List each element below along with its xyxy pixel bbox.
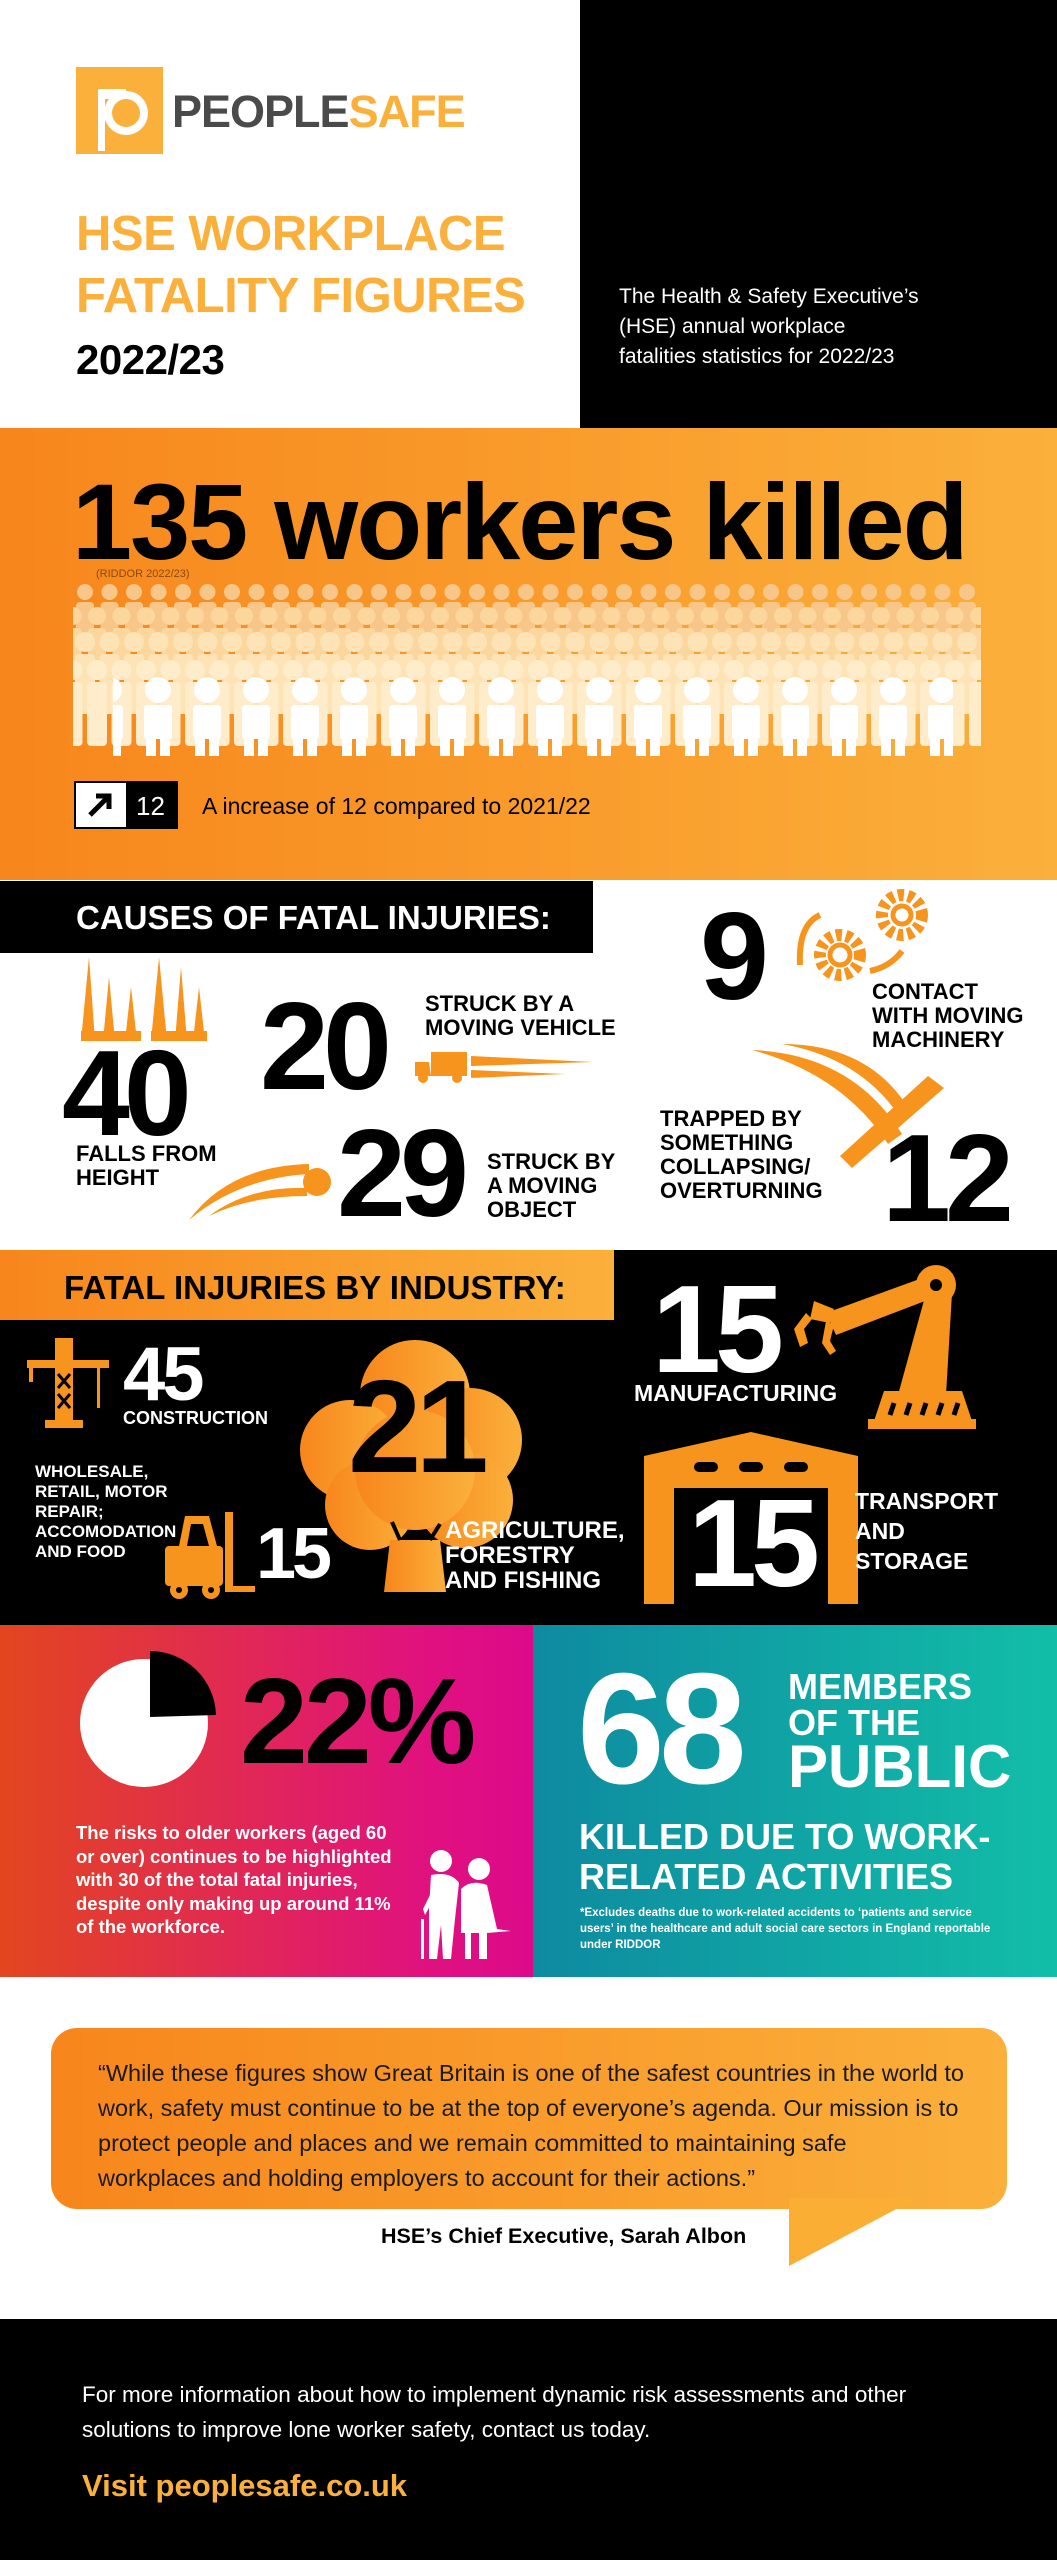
label: members of the public: PUBLIC [788, 1733, 1011, 1800]
text: older workers: or over) continues to be highlighted [76, 1846, 392, 1866]
icon: falling spikes [81, 957, 207, 1041]
stat: manufacturing [634, 1261, 837, 1406]
stat: wholesale retail: WHOLESALE, [35, 1462, 148, 1481]
label: agriculture [445, 1517, 625, 1594]
increase badge [74, 781, 178, 829]
stat: wholesale retail: ACCOMODATION [35, 1522, 176, 1541]
increase text: A increase of 12 compared to 2021/22 [202, 793, 591, 819]
logo [76, 67, 465, 154]
icon: truck [415, 1052, 592, 1083]
panel: older workers [0, 1625, 533, 1977]
icon: warehouse with stat [644, 1432, 858, 1613]
icon: crane [27, 1338, 109, 1428]
stat: wholesale retail: AND FOOD [35, 1542, 126, 1561]
title [76, 207, 525, 383]
quote attribution: HSE’s Chief Executive, Sarah Albon [381, 2224, 746, 2248]
stat: struck by moving object [337, 1105, 615, 1243]
label: transport and storage [855, 1488, 998, 1574]
stat: struck by moving object: A MOVING [487, 1173, 597, 1198]
label: agriculture: FORESTRY [445, 1542, 575, 1569]
text: killed due to work: RELATED ACTIVITIES [579, 1856, 953, 1897]
stat: wholesale retail: REPAIR; [35, 1502, 104, 1521]
quote text: workplaces and holding employers to account for their actions.” [98, 2165, 755, 2191]
footer text [82, 2382, 906, 2442]
icon: collapsing [752, 1044, 944, 1168]
footer text: solutions to improve lone worker safety, contact us today. [82, 2417, 650, 2442]
stat: trapped by collapsing: 12 [882, 1110, 1008, 1248]
label: transport and storage: TRANSPORT [855, 1488, 998, 1514]
stat: contact with moving machinery [700, 888, 1024, 1052]
icon: forklift [165, 1512, 255, 1599]
label: members of the public: OF THE [788, 1702, 920, 1743]
stat: 22%: 22% [240, 1653, 472, 1789]
stat: manufacturing: MANUFACTURING [634, 1380, 837, 1406]
heading [0, 1250, 614, 1320]
heading: CAUSES OF FATAL INJURIES: [76, 899, 551, 936]
stat: 68: 68 [577, 1641, 741, 1817]
footnote: users’ in the healthcare and adult social care sectors in England reportable [580, 1923, 990, 1935]
label: members of the public: MEMBERS [788, 1666, 972, 1707]
icon: arrow up-right [76, 783, 126, 827]
number: 15: 15 [688, 1475, 814, 1613]
stat: struck by moving object: OBJECT [487, 1197, 576, 1222]
header: left white panel [0, 0, 580, 428]
quote text: protect people and places and we remain committed to maintaining safe [98, 2130, 847, 2156]
title: FATALITY FIGURES [76, 269, 525, 323]
text: older workers: of the workforce. [76, 1916, 225, 1937]
footer link: Visit peoplesafe.co.uk [82, 2468, 407, 2503]
stat: falls from height: 40 [62, 1025, 186, 1161]
logo wordmark: PEOPLESAFE [172, 86, 465, 137]
quote text [98, 2060, 964, 2191]
source note: (RIDDOR 2022/23) [96, 568, 190, 580]
chart: pie 22% [80, 1651, 216, 1787]
title: HSE WORKPLACE [76, 207, 505, 261]
stat: struck by moving vehicle: 20 [260, 978, 386, 1116]
label: agriculture: AND FISHING [445, 1567, 601, 1594]
stat: construction [123, 1332, 268, 1428]
panel: causes of fatal injuries [0, 880, 1057, 1250]
text: older workers: with 30 of the total fatal injuries, [76, 1869, 358, 1890]
stat: trapped by collapsing [660, 1106, 1009, 1248]
heading [0, 881, 593, 953]
heading: FATAL INJURIES BY INDUSTRY: [64, 1269, 566, 1306]
stat: falls from height [62, 1025, 217, 1190]
headline: 135 workers killed [72, 461, 967, 582]
stat: trapped by collapsing: COLLAPSING/ [660, 1154, 810, 1179]
text: killed due to work [579, 1816, 990, 1897]
icon: tree with stat [300, 1340, 522, 1592]
label: agriculture: AGRICULTURE, [445, 1517, 625, 1544]
title: 2022/23 [76, 336, 224, 383]
intro text: fatalities statistics for 2022/23 [619, 345, 894, 368]
text: older workers: despite only making up around 11% [76, 1892, 391, 1914]
stat: trapped by collapsing: OVERTURNING [660, 1178, 823, 1203]
text: killed due to work: KILLED DUE TO WORK- [579, 1816, 990, 1857]
stat: construction: 45 [123, 1332, 202, 1417]
stat: struck by moving object: STRUCK BY [487, 1149, 615, 1174]
stat: falls from height: FALLS FROM [76, 1141, 217, 1166]
intro text: (HSE) annual workplace [619, 315, 845, 338]
intro text [619, 285, 919, 368]
quote text: work, safety must continue to be at the top of everyone’s agenda. Our mission is to [98, 2095, 958, 2121]
label: members of the public [788, 1666, 1011, 1800]
quote text: “While these figures show Great Britain is one of the safest countries in the world to [98, 2060, 964, 2086]
stat: contact with moving machinery: CONTACT [872, 979, 978, 1004]
footnote: *Excludes deaths due to work-related accidents to ‘patients and service [580, 1907, 972, 1919]
text: older workers [76, 1822, 392, 1937]
panel: 135 workers killed [0, 428, 1057, 880]
header: right black panel [580, 0, 1057, 428]
stat: trapped by collapsing: TRAPPED BY [660, 1106, 802, 1131]
stat: trapped by collapsing: SOMETHING [660, 1130, 793, 1155]
stat: construction: CONSTRUCTION [123, 1408, 268, 1428]
stat: falls from height: HEIGHT [76, 1165, 159, 1190]
icon: gears [796, 889, 928, 981]
intro text: The Health & Safety Executive’s [619, 285, 919, 308]
panel: members of the public [533, 1625, 1057, 1977]
icon: logo mark [76, 67, 163, 154]
label: transport and storage: AND [855, 1518, 905, 1544]
footer text: For more information about how to implement dynamic risk assessments and other [82, 2382, 906, 2407]
stat: manufacturing: 15 [652, 1261, 778, 1399]
chart: people pictogram [73, 584, 981, 756]
stat: struck by moving vehicle [260, 978, 616, 1116]
stat: struck by moving object: 29 [337, 1105, 463, 1243]
stat: wholesale retail: 15 [256, 1514, 328, 1594]
footnote: under RIDDOR [580, 1939, 660, 1951]
icon: moving ball [189, 1164, 331, 1220]
callout: quote bubble [51, 2028, 1007, 2266]
stat: contact with moving machinery: MACHINERY [872, 1027, 1004, 1052]
label: transport and storage: STORAGE [855, 1548, 968, 1574]
stat: wholesale retail: RETAIL, MOTOR [35, 1482, 168, 1501]
stat: wholesale retail [35, 1462, 330, 1594]
stat: contact with moving machinery: WITH MOVING [872, 1003, 1024, 1028]
increase badge: 12 [136, 791, 165, 821]
number: 21: 21 [348, 1353, 483, 1500]
stat: struck by moving vehicle: STRUCK BY A [425, 991, 574, 1016]
stat: struck by moving vehicle: MOVING VEHICLE [425, 1015, 616, 1040]
panel: fatal injuries by industry [0, 1250, 1057, 1625]
footnote [580, 1907, 990, 1951]
text: older workers: The risks to older workers (aged 60 [76, 1822, 386, 1843]
icon: elderly couple [421, 1850, 511, 1959]
stat: contact with moving machinery: 9 [700, 888, 769, 1026]
footer [0, 2319, 1057, 2560]
icon: robot arm [794, 1265, 976, 1429]
